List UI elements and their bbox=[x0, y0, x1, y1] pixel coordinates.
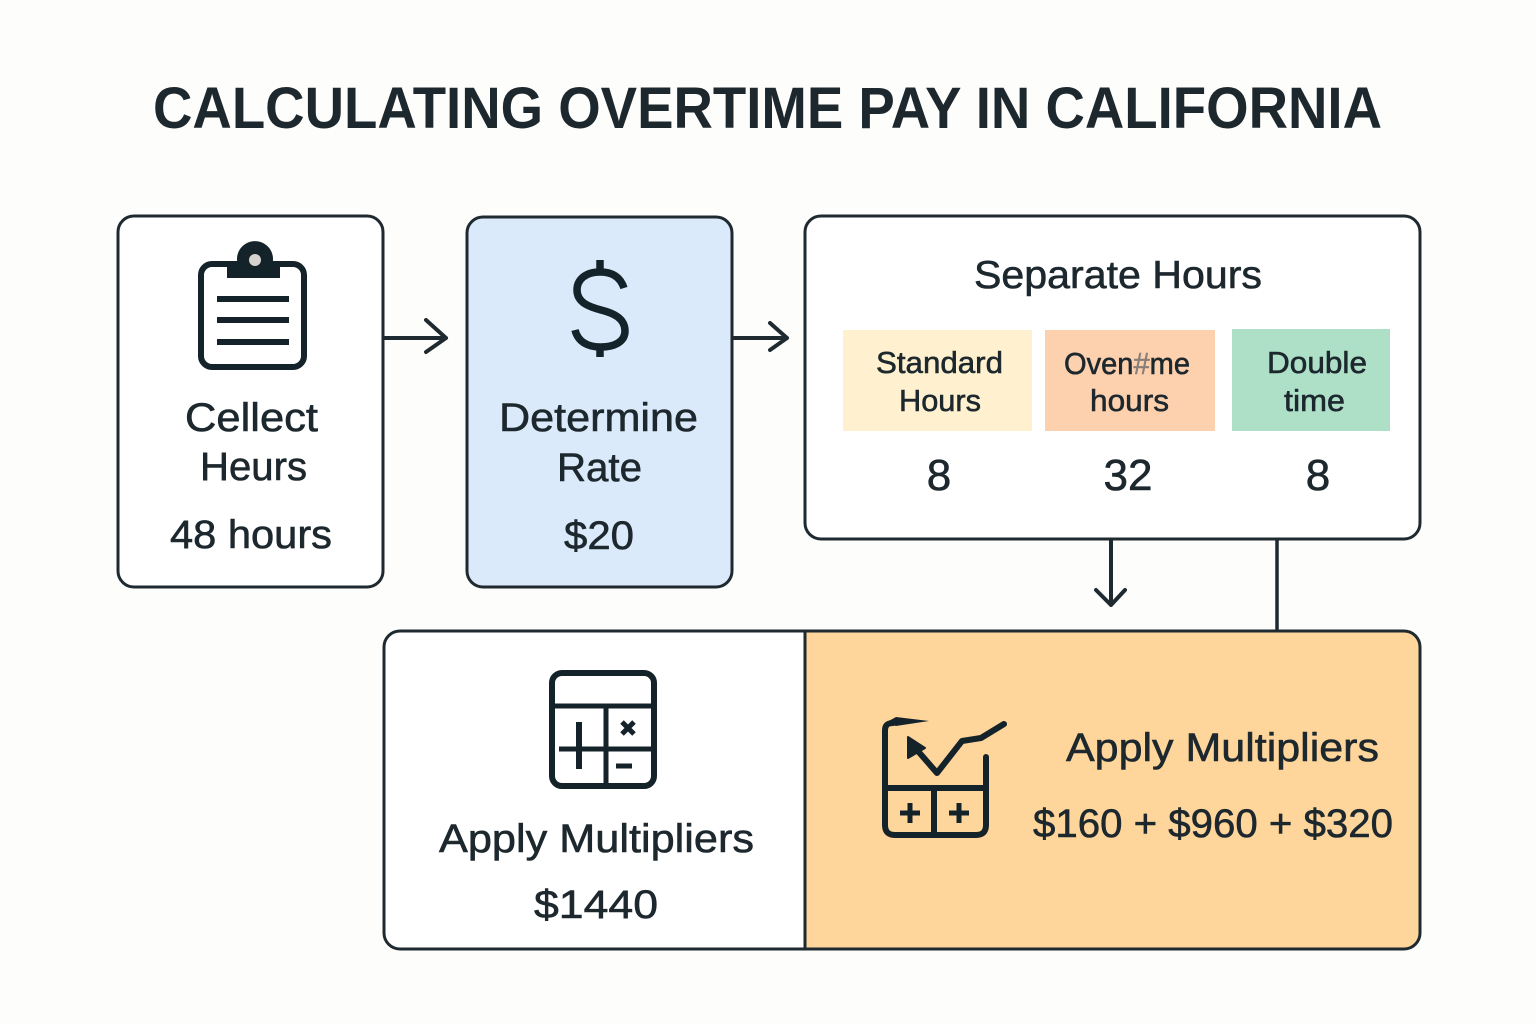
cell: overtime hours: Oven#me bbox=[1064, 346, 1190, 381]
cell: standard hours bbox=[843, 330, 1032, 431]
icon: chart with plus keys bbox=[885, 717, 1004, 835]
panel: collect hours bbox=[118, 216, 383, 587]
value: sum of pay components: $160 + $960 + $320 bbox=[1033, 802, 1393, 846]
panel: apply multipliers breakdown bbox=[805, 631, 1420, 949]
value: double 8: 8 bbox=[1306, 451, 1330, 500]
cell: overtime hours bbox=[1045, 330, 1215, 431]
value: standard 8: 8 bbox=[927, 451, 951, 500]
heading: separate hours: Separate Hours bbox=[974, 254, 1262, 297]
connector: separate to multipliers bbox=[1275, 540, 1279, 631]
cell: double time: Double bbox=[1267, 345, 1367, 380]
heading: cellect heurs: Cellect bbox=[185, 396, 318, 440]
value: $20: $20 bbox=[564, 514, 634, 558]
heading: determine rate: Rate bbox=[557, 446, 642, 490]
cell: standard hours: Standard bbox=[876, 345, 1003, 380]
arrow: separate down to multipliers bbox=[1096, 540, 1125, 605]
heading: determine rate bbox=[499, 396, 698, 490]
cell: overtime hours: hours bbox=[1090, 383, 1169, 418]
icon: dollar sign bbox=[575, 260, 625, 357]
panel: determine rate bbox=[467, 217, 732, 587]
value: $1440: $1440 bbox=[534, 883, 658, 927]
title: CALCULATING OVERTIME PAY IN CALIFORNIA bbox=[153, 76, 1382, 141]
panel: apply multipliers total bbox=[384, 631, 805, 949]
heading: apply multipliers: Apply Multipliers bbox=[439, 817, 754, 861]
value: 48 hours: 48 hours bbox=[170, 513, 332, 557]
value: overtime 32: 32 bbox=[1104, 451, 1152, 500]
arrow: rate to separate bbox=[733, 323, 787, 350]
heading: apply multipliers: Apply Multipliers bbox=[1066, 726, 1379, 770]
cell: double time: time bbox=[1284, 383, 1345, 418]
heading: cellect heurs: Heurs bbox=[200, 445, 307, 489]
icon: clipboard bbox=[201, 241, 304, 367]
cell: double time bbox=[1232, 329, 1390, 431]
panel: separate hours bbox=[805, 216, 1420, 539]
heading: cellect heurs bbox=[185, 396, 318, 489]
icon: calculator bbox=[552, 673, 654, 786]
arrow: collect to rate bbox=[384, 320, 446, 352]
cell: standard hours: Hours bbox=[899, 383, 981, 418]
heading: determine rate: Determine bbox=[499, 396, 698, 440]
